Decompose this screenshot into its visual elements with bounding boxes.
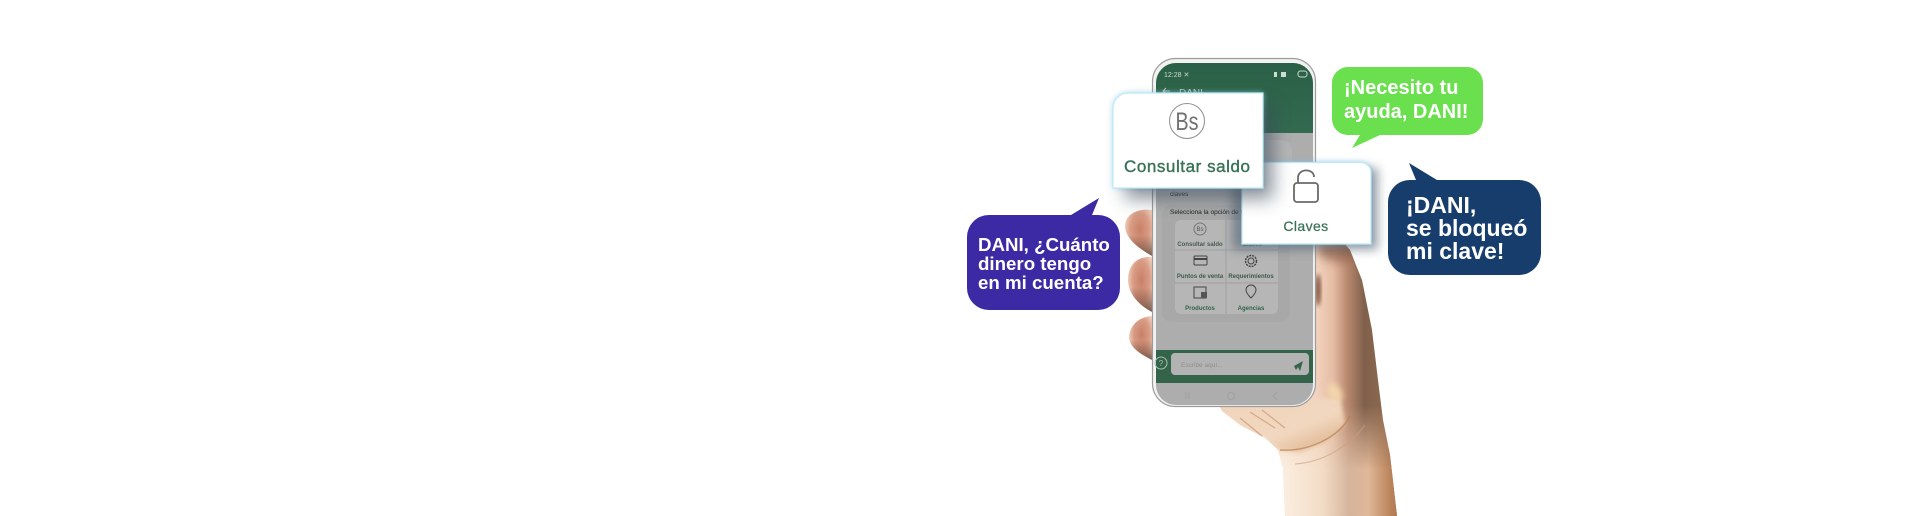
input placeholder: Escribe aquí... — [1181, 362, 1223, 369]
finger: lower — [1129, 316, 1152, 360]
card: claves — [1232, 162, 1378, 250]
option: requerimientos: Requerimientos — [1228, 274, 1274, 280]
help icon — [1155, 357, 1167, 369]
card background — [1113, 93, 1263, 188]
option: agencias: Agencias — [1238, 306, 1265, 312]
option: consultar saldo: Consultar saldo — [1177, 242, 1223, 248]
message input — [1171, 353, 1309, 375]
speech bubble: necesito ayuda: ayuda, DANI! — [1344, 101, 1468, 123]
icon: open padlock — [1294, 170, 1318, 202]
finger: middle — [1128, 257, 1152, 312]
hand holding the phone — [1125, 210, 1420, 516]
speech bubble: cuánto dinero — [967, 198, 1120, 310]
chat text: claves — [1170, 191, 1189, 198]
speech bubble: clave bloqueada: mi clave! — [1406, 238, 1504, 264]
card background — [1242, 162, 1371, 244]
card shadow — [1125, 105, 1273, 199]
back arrow — [1163, 88, 1170, 94]
card: consultar saldo — [1113, 93, 1273, 199]
option: puntos de venta: Puntos de venta — [1177, 274, 1224, 280]
send icon — [1294, 361, 1303, 371]
icon: Bs coin: Bs — [1176, 108, 1198, 136]
speech bubble: cuánto dinero: en mi cuenta? — [978, 272, 1104, 293]
navigation buttons — [1186, 392, 1277, 400]
speech bubble: necesito ayuda — [1332, 67, 1483, 148]
icon: Bs coin — [1170, 104, 1204, 138]
help icon: ? — [1159, 359, 1164, 368]
phone body — [1152, 58, 1316, 406]
phone screen — [1156, 63, 1313, 405]
card shadow — [1232, 168, 1378, 250]
options grid — [1175, 220, 1278, 314]
speech bubble: clave bloqueada: se bloqueó — [1406, 215, 1527, 241]
speech bubble: necesito ayuda: ¡Necesito tu — [1344, 77, 1458, 99]
card glow — [1242, 162, 1371, 244]
option: claves: Claves — [1242, 242, 1262, 248]
hand: palm and wrist — [1220, 244, 1397, 516]
option: productos: Productos — [1185, 306, 1215, 312]
option: consultar saldo — [1177, 223, 1223, 248]
app title: DANI — [1179, 88, 1203, 99]
options prompt: Selecciona la opción de tu — [1170, 209, 1246, 216]
app header — [1156, 63, 1313, 133]
card label: Consultar saldo — [1124, 157, 1250, 176]
options panel — [1162, 205, 1290, 322]
card label: Claves — [1283, 218, 1329, 234]
option: consultar saldo: Bs — [1196, 227, 1204, 233]
input bar — [1156, 350, 1313, 383]
smartphone — [1152, 58, 1316, 406]
finger: top — [1125, 210, 1152, 256]
speech bubble: cuánto dinero: dinero tengo — [978, 253, 1091, 274]
chat message — [1162, 140, 1292, 190]
speech bubble: clave bloqueada: ¡DANI, — [1406, 192, 1476, 218]
status bar: 12:28 ✕ — [1164, 72, 1189, 79]
speech bubble: cuánto dinero: DANI, ¿Cuánto — [978, 234, 1110, 255]
status icons — [1274, 71, 1307, 77]
speech bubble: clave bloqueada — [1388, 163, 1541, 275]
card glow — [1113, 93, 1263, 188]
